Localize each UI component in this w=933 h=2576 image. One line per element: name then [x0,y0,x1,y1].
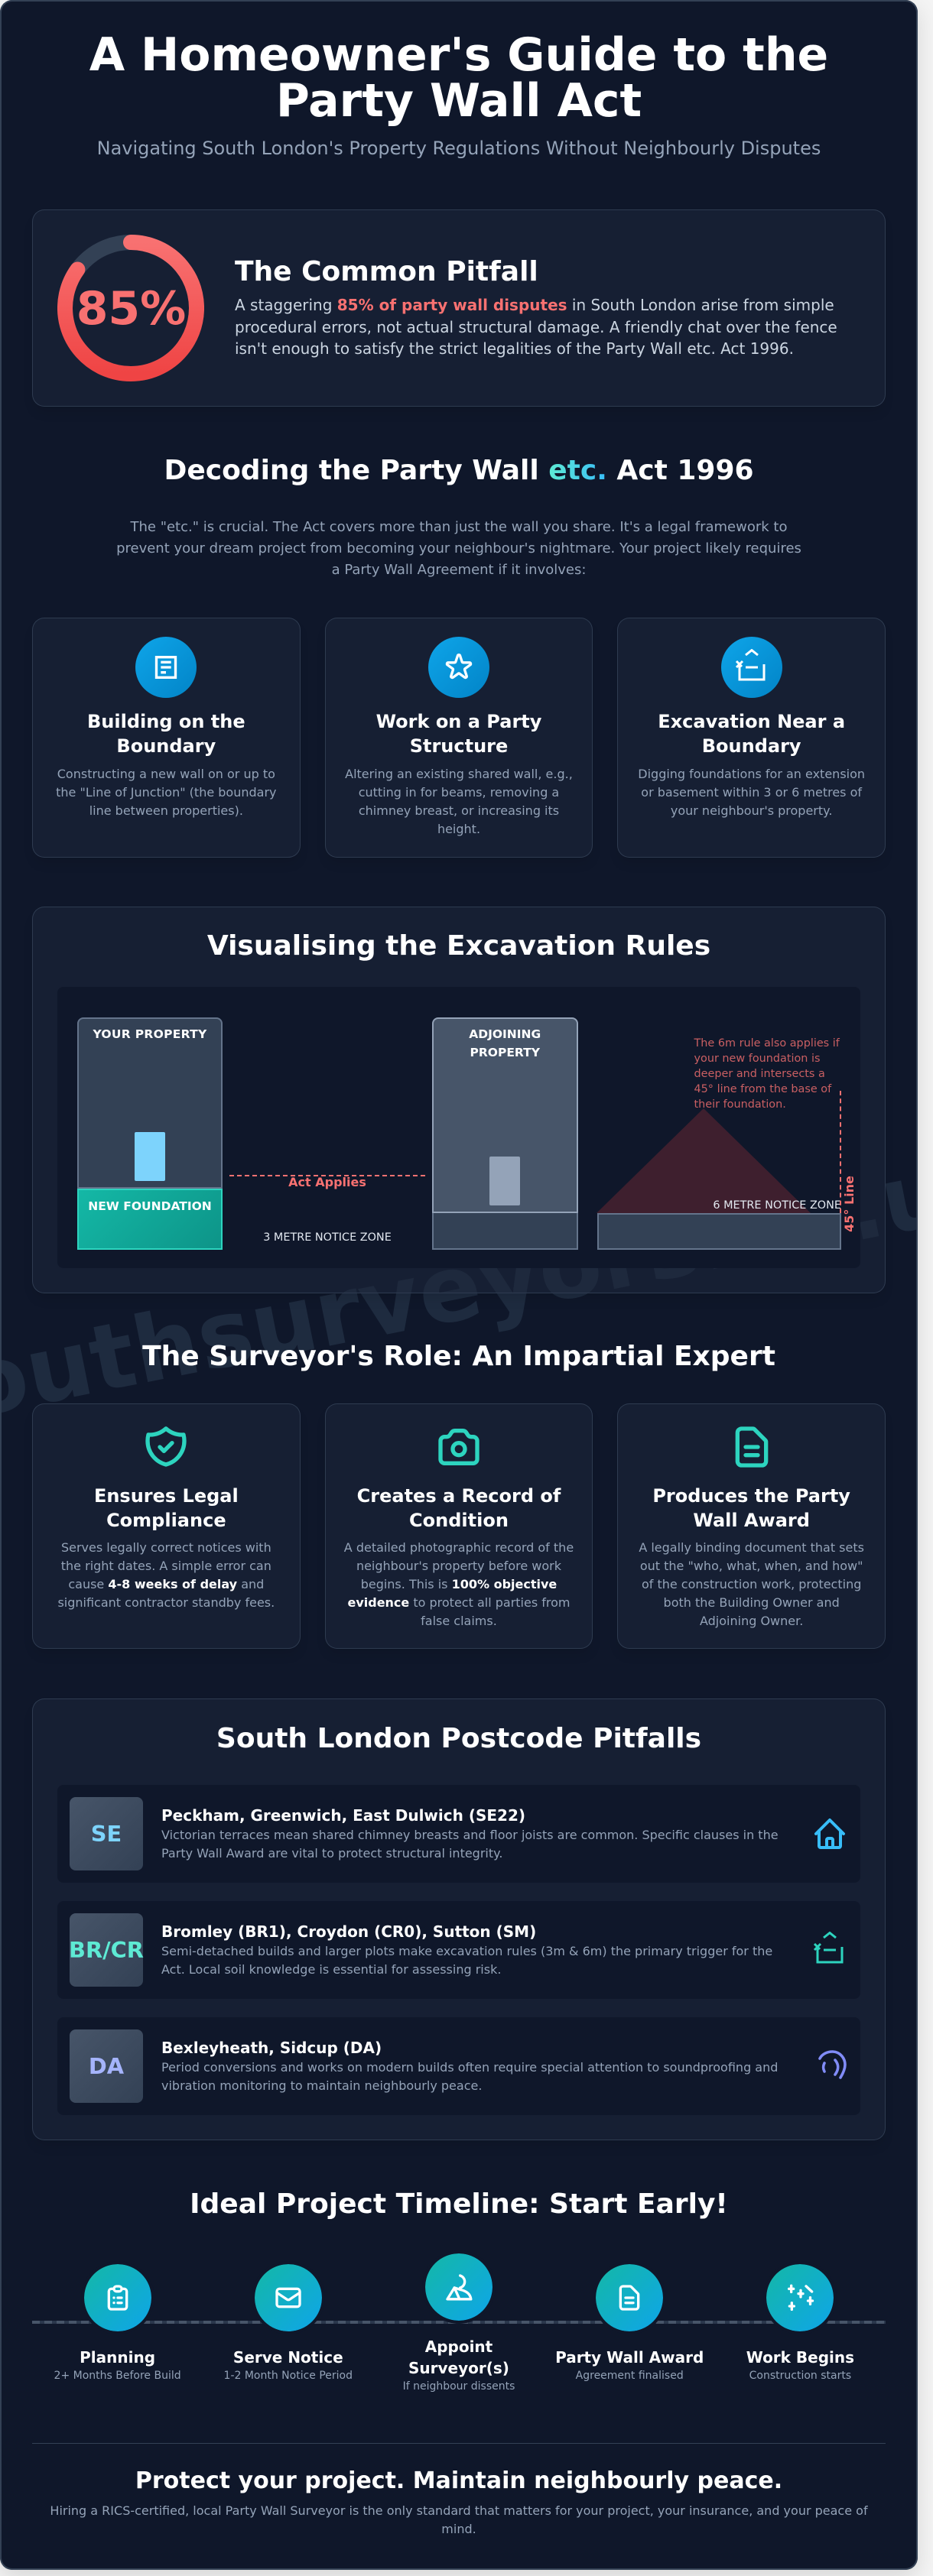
card text: evidence to protect all parties from [347,1595,570,1610]
card text: A detailed photographic record of the [344,1539,574,1555]
dashed vertical line [840,1091,841,1213]
heading: decoding the act: Decoding the Party Wall etc. Act 1996 [164,454,754,486]
intro paragraph: The "etc." is crucial. The Act covers more than just the wall you share. It's a legal framework to [130,519,787,535]
diagram [57,987,860,1268]
card title [94,1485,239,1531]
card text: or basement within 3 or 6 metres of [641,784,862,800]
card title [652,1485,850,1531]
card text: Digging foundations for an extension [638,766,865,781]
45 degree note: your new foundation is [694,1053,820,1065]
row: DA [57,2017,860,2114]
row text: vibration monitoring to maintain neighbourly peace. [161,2078,482,2093]
pitfall heading: The Common Pitfall [235,256,538,287]
card: excavation near a boundary [617,618,886,858]
adjoining property building [432,1017,578,1213]
icon: excavation [814,1932,843,1963]
timeline line [32,2321,886,2324]
new foundation label: NEW FOUNDATION [88,1199,212,1212]
step label: Planning [80,2348,155,2367]
card title [376,711,541,757]
card text: cutting in for beams, removing a [359,784,559,800]
heading: timeline: Ideal Project Timeline: Start Early! [190,2188,728,2220]
pitfall text [235,296,837,358]
card text: Adjoining Owner. [700,1613,803,1628]
45 degree note: The 6m rule also applies if [694,1037,840,1050]
step label: Appoint [425,2338,493,2356]
icon: document [135,637,197,698]
3 metre zone label: 3 METRE NOTICE ZONE [263,1231,392,1244]
step detail: Agreement finalised [576,2370,684,2382]
card title: Condition [409,1510,509,1531]
row title: Bromley (BR1), Croydon (CR0), Sutton (SM) [161,1922,536,1941]
title: A Homeowner's Guide to the [89,28,828,82]
intro paragraph: prevent your dream project from becoming your neighbour's nightmare. Your project likely requires [116,540,801,556]
45 degree note: 45° line from the base of [694,1083,831,1095]
badge BR/CR: BR/CR [69,1937,144,1963]
card text: height. [437,821,480,836]
card text: A legally binding document that sets [639,1539,864,1555]
badge SE: SE [91,1821,122,1847]
card title [87,711,245,757]
6 metre zone label: 6 METRE NOTICE ZONE [713,1199,841,1212]
card: building on the boundary [32,618,301,858]
panel: postcode pitfalls [32,1698,886,2140]
step label: Serve Notice [233,2348,343,2367]
icon: mail [252,2261,325,2334]
icon: sparkles [763,2261,837,2334]
panel: visualising the excavation rules [32,907,886,1293]
row text: Victorian terraces mean shared chimney breasts and floor joists are common. Specific clauses in the [161,1827,779,1842]
card text: neighbour's property before work [356,1558,561,1573]
dashed line: act applies [229,1175,425,1176]
card text [345,766,573,836]
card title: Boundary [702,735,801,757]
card text: out the "who, what, when, and how" [640,1558,863,1573]
title: Party Wall Act [276,74,642,128]
row text: Period conversions and works on modern builds often require special attention to soundproofing and [161,2059,778,2075]
panel: the common pitfall [32,209,886,407]
row: BR/CR [57,1901,860,1999]
act applies label: Act Applies [288,1174,366,1189]
ground block [597,1213,841,1250]
card text [638,766,865,818]
45 degree line label: 45° Line [841,1176,857,1232]
step label: Surveyor(s) [408,2359,509,2377]
pitfall text: A staggering 85% of party wall disputes in South London arise from simple [235,296,834,314]
intro paragraph [116,519,801,578]
step detail: 2+ Months Before Build [54,2370,181,2382]
step: work begins [746,2264,854,2382]
adjoining window [489,1157,520,1205]
card title [658,711,845,757]
badge DA [70,2029,143,2103]
card text: the "Line of Junction" (the boundary [56,784,277,800]
row text [161,1827,779,1861]
title [89,28,828,128]
45 degree note [694,1037,840,1111]
adjoining property label: ADJOINING [469,1027,541,1041]
panel heading: Visualising the Excavation Rules [207,930,710,962]
card: work on a party structure [325,618,593,858]
panel heading: South London Postcode Pitfalls [216,1723,701,1754]
footer text: mind. [441,2521,476,2536]
row text: Semi-detached builds and larger plots make excavation rules (3m & 6m) the primary trigger for the [161,1943,772,1958]
step label: Work Begins [746,2348,854,2367]
45 degree note: deeper and intersects a [694,1068,825,1080]
icon: clipboard [81,2261,154,2334]
heading: surveyor's role: The Surveyor's Role: An Impartial Expert [142,1341,775,1371]
card title: Boundary [116,735,216,757]
icon: surveyor [422,2250,496,2324]
card text: Constructing a new wall on or up to [57,766,275,781]
card text: significant contractor standby fees. [57,1595,275,1610]
step: appoint surveyors [403,2253,515,2393]
card title: Structure [410,735,508,757]
card text: cause 4-8 weeks of delay and [68,1576,264,1591]
row title: Bexleyheath, Sidcup (DA) [161,2039,382,2057]
card text [56,766,277,818]
card text: line between properties). [89,803,243,818]
row text [161,2059,778,2093]
card text [57,1539,275,1610]
icon: home [814,1818,846,1849]
row text: Act. Local soil knowledge is essential for assessing risk. [161,1961,501,1977]
card title: Creates a Record of [357,1485,561,1507]
footer heading: Protect your project. Maintain neighbourly peace. [135,2467,782,2494]
card text: of the construction work, protecting [642,1576,861,1591]
step detail: Construction starts [749,2370,851,2382]
subtitle: Navigating South London's Property Regulations Without Neighbourly Disputes [97,138,821,159]
row: SE [57,1785,860,1882]
adjoining foundation [432,1213,578,1250]
adjoining property label [469,1027,541,1059]
row text [161,1943,772,1977]
footer divider [32,2443,886,2444]
card title: Excavation Near a [658,711,845,732]
card text [344,1539,574,1628]
step label: Party Wall Award [555,2348,704,2367]
card title: Wall Award [693,1510,810,1531]
card title [357,1485,561,1531]
card: ensures legal compliance [32,1403,301,1649]
step label [408,2338,509,2377]
card text: Serves legally correct notices with [61,1539,271,1555]
ring value: 85% [76,282,186,336]
badge SE [70,1797,143,1870]
icon: shield [145,1426,187,1467]
icon: excavation [721,637,782,698]
card text: Altering an existing shared wall, e.g., [345,766,573,781]
step: planning [54,2264,181,2382]
45 degree zone triangle [597,1108,811,1213]
icon: camera [438,1429,480,1465]
your property label: YOUR PROPERTY [93,1027,207,1041]
pitfall text: procedural errors, not actual structural damage. A friendly chat over the fence [235,318,837,336]
footer text [50,2503,868,2536]
row text: Party Wall Award are vital to protect structural integrity. [161,1845,502,1861]
card: produces the party wall award [617,1403,886,1649]
card text: both the Building Owner and [664,1595,840,1610]
your property window [135,1132,165,1181]
card: creates a record of condition [325,1403,593,1649]
card title: Ensures Legal [94,1485,239,1507]
icon: star [428,637,489,698]
card text: your neighbour's property. [671,803,832,818]
step detail: 1-2 Month Notice Period [224,2370,353,2382]
45 degree note: their foundation. [694,1098,786,1111]
card text: false claims. [421,1613,497,1628]
card title: Produces the Party [652,1485,850,1507]
step detail: If neighbour dissents [403,2380,515,2393]
row title: Peckham, Greenwich, East Dulwich (SE22) [161,1806,525,1825]
new foundation [77,1189,223,1250]
card text: the right dates. A simple error can [61,1558,271,1573]
chart: 85 percent ring [57,235,204,381]
pitfall text: isn't enough to satisfy the strict legalities of the Party Wall etc. Act 1996. [235,339,794,358]
card title: Work on a Party [376,711,541,732]
badge DA: DA [89,2053,124,2079]
your property building [77,1017,223,1189]
card text [639,1539,864,1628]
icon: document [593,2261,666,2334]
badge BR/CR [70,1913,143,1987]
adjoining property label: PROPERTY [470,1046,540,1059]
step: party wall award [555,2264,704,2382]
icon: document [736,1426,768,1468]
card title: Compliance [106,1510,226,1531]
card text: chimney breast, or increasing its [359,803,559,818]
card text: begins. This is 100% objective [361,1576,557,1591]
card title: Building on the [87,711,245,732]
step: serve notice [224,2264,353,2382]
intro paragraph: a Party Wall Agreement if it involves: [332,562,586,578]
footer text: Hiring a RICS-certified, local Party Wall Surveyor is the only standard that matters for your project, your insurance, and your peace of [50,2503,868,2518]
icon: sound [818,2050,847,2079]
